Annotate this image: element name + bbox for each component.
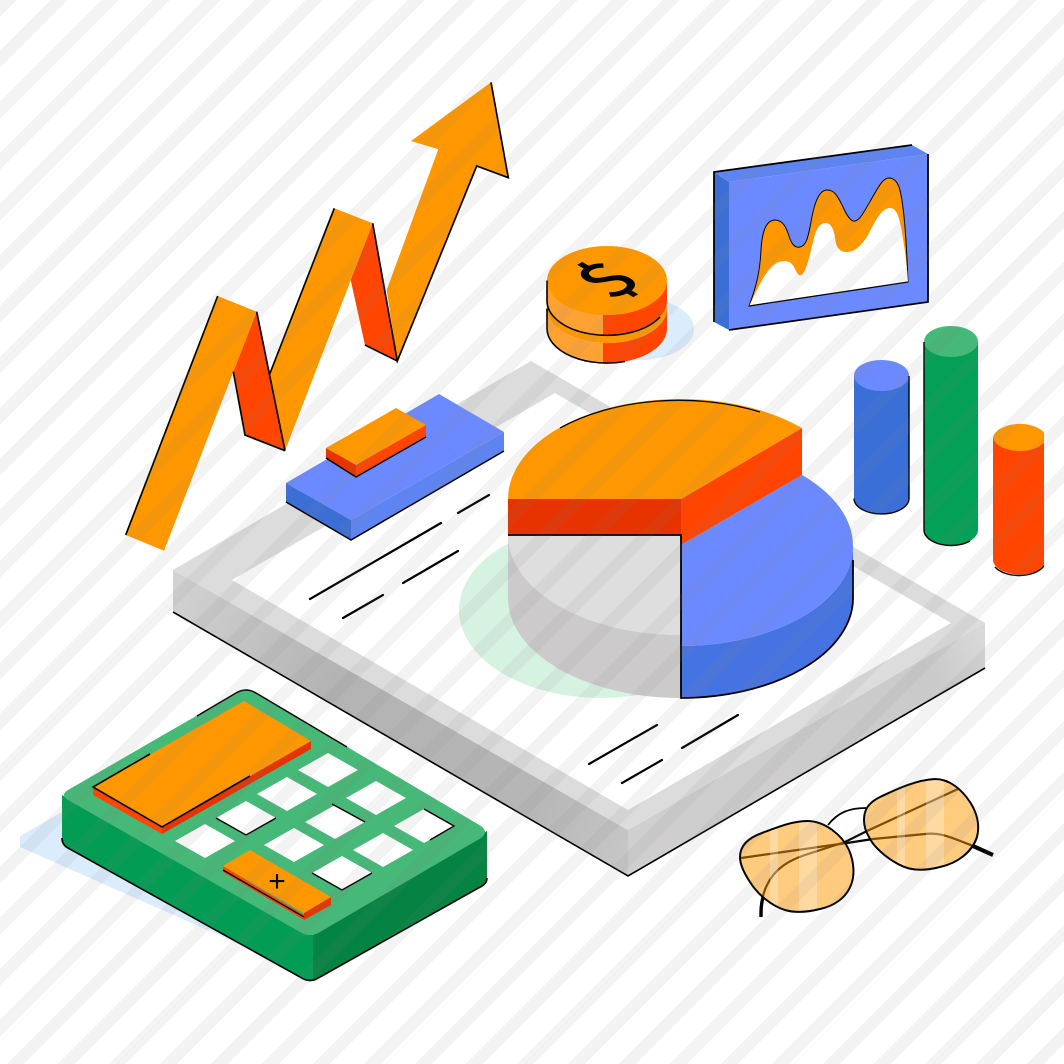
area chart bbox=[749, 178, 908, 306]
temples and bridge bbox=[741, 789, 993, 917]
coin shadow bbox=[586, 298, 694, 360]
gray slice bbox=[508, 535, 681, 698]
left lens bbox=[739, 820, 854, 913]
orange raised slice bbox=[508, 399, 802, 545]
orange block bbox=[326, 408, 426, 477]
calculator shadow bbox=[20, 812, 310, 980]
lower coin bbox=[547, 274, 667, 363]
sunglasses bbox=[740, 770, 993, 920]
blue block bbox=[286, 394, 504, 540]
plus sign: + bbox=[268, 865, 286, 898]
pie chart bbox=[508, 399, 853, 698]
pie shadow bbox=[459, 522, 743, 698]
bar: blue cylinder bbox=[854, 360, 909, 514]
text lines on paper bbox=[310, 495, 738, 783]
calculator bbox=[62, 690, 487, 981]
plus button bbox=[223, 850, 331, 920]
bar: green cylinder bbox=[924, 326, 978, 545]
growth arrow bbox=[126, 82, 508, 551]
bar: orange cylinder bbox=[993, 424, 1044, 576]
calculator keys bbox=[175, 753, 454, 890]
dollar sign: $ bbox=[546, 244, 661, 311]
chart panel bbox=[714, 145, 928, 330]
calculator screen bbox=[93, 701, 311, 834]
right lens bbox=[863, 778, 980, 871]
paper slab bbox=[173, 361, 985, 876]
upper coin bbox=[547, 246, 667, 335]
coin stack bbox=[546, 244, 667, 363]
blue slice bbox=[681, 475, 853, 698]
